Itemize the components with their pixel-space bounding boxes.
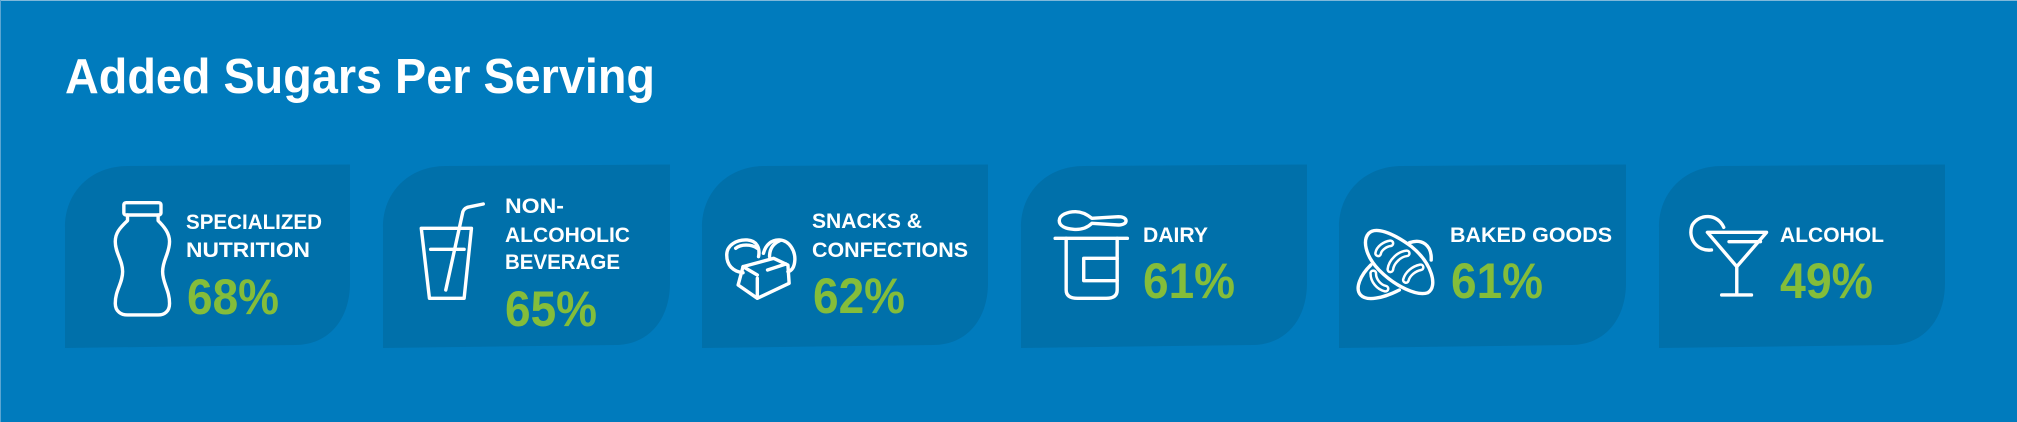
label: snacks and confections: SNACKS & <box>812 210 922 233</box>
label: baked goods: BAKED GOODS <box>1450 224 1612 247</box>
label: specialized nutrition: SPECIALIZED <box>186 211 322 234</box>
panel background: non-alcoholic beverage <box>383 164 670 348</box>
panel background: snacks and confections <box>702 164 988 348</box>
panel: baked goods <box>1339 164 1626 348</box>
value: 62%: 62% <box>813 268 905 324</box>
icon: bottle <box>115 203 170 315</box>
panel background: dairy <box>1021 164 1307 348</box>
icon: glass with straw <box>421 204 483 298</box>
label: dairy: DAIRY <box>1143 224 1208 247</box>
label: non-alcoholic beverage: ALCOHOLIC <box>505 224 630 247</box>
value: 49%: 49% <box>1780 253 1873 309</box>
label: non-alcoholic beverage: BEVERAGE <box>505 251 620 274</box>
label: non-alcoholic beverage: NON- <box>505 195 564 218</box>
icon: yogurt cup and spoon <box>1055 212 1127 298</box>
panel background: baked goods <box>1339 164 1626 348</box>
panel: non-alcoholic beverage <box>383 164 670 348</box>
label: alcohol: ALCOHOL <box>1780 224 1884 247</box>
value: 68%: 68% <box>187 269 279 325</box>
value: 61% baked goods: 61% <box>1451 253 1543 309</box>
panel background: specialized nutrition <box>65 164 350 348</box>
icon: martini glass <box>1691 217 1767 295</box>
icon: confections <box>727 240 795 298</box>
panel: specialized nutrition <box>65 164 350 348</box>
title: Added Sugars Per Serving <box>65 50 655 104</box>
icon: bread loaves <box>1358 230 1433 299</box>
panel background: alcohol <box>1659 164 1945 348</box>
value: 65%: 65% <box>505 281 597 337</box>
label: specialized nutrition: NUTRITION <box>186 239 310 262</box>
panel: dairy <box>1021 164 1307 348</box>
panel: alcohol <box>1659 164 1945 348</box>
label: snacks and confections: CONFECTIONS <box>812 239 968 262</box>
panel: snacks and confections <box>702 164 988 348</box>
value: 61% dairy: 61% <box>1143 253 1235 309</box>
